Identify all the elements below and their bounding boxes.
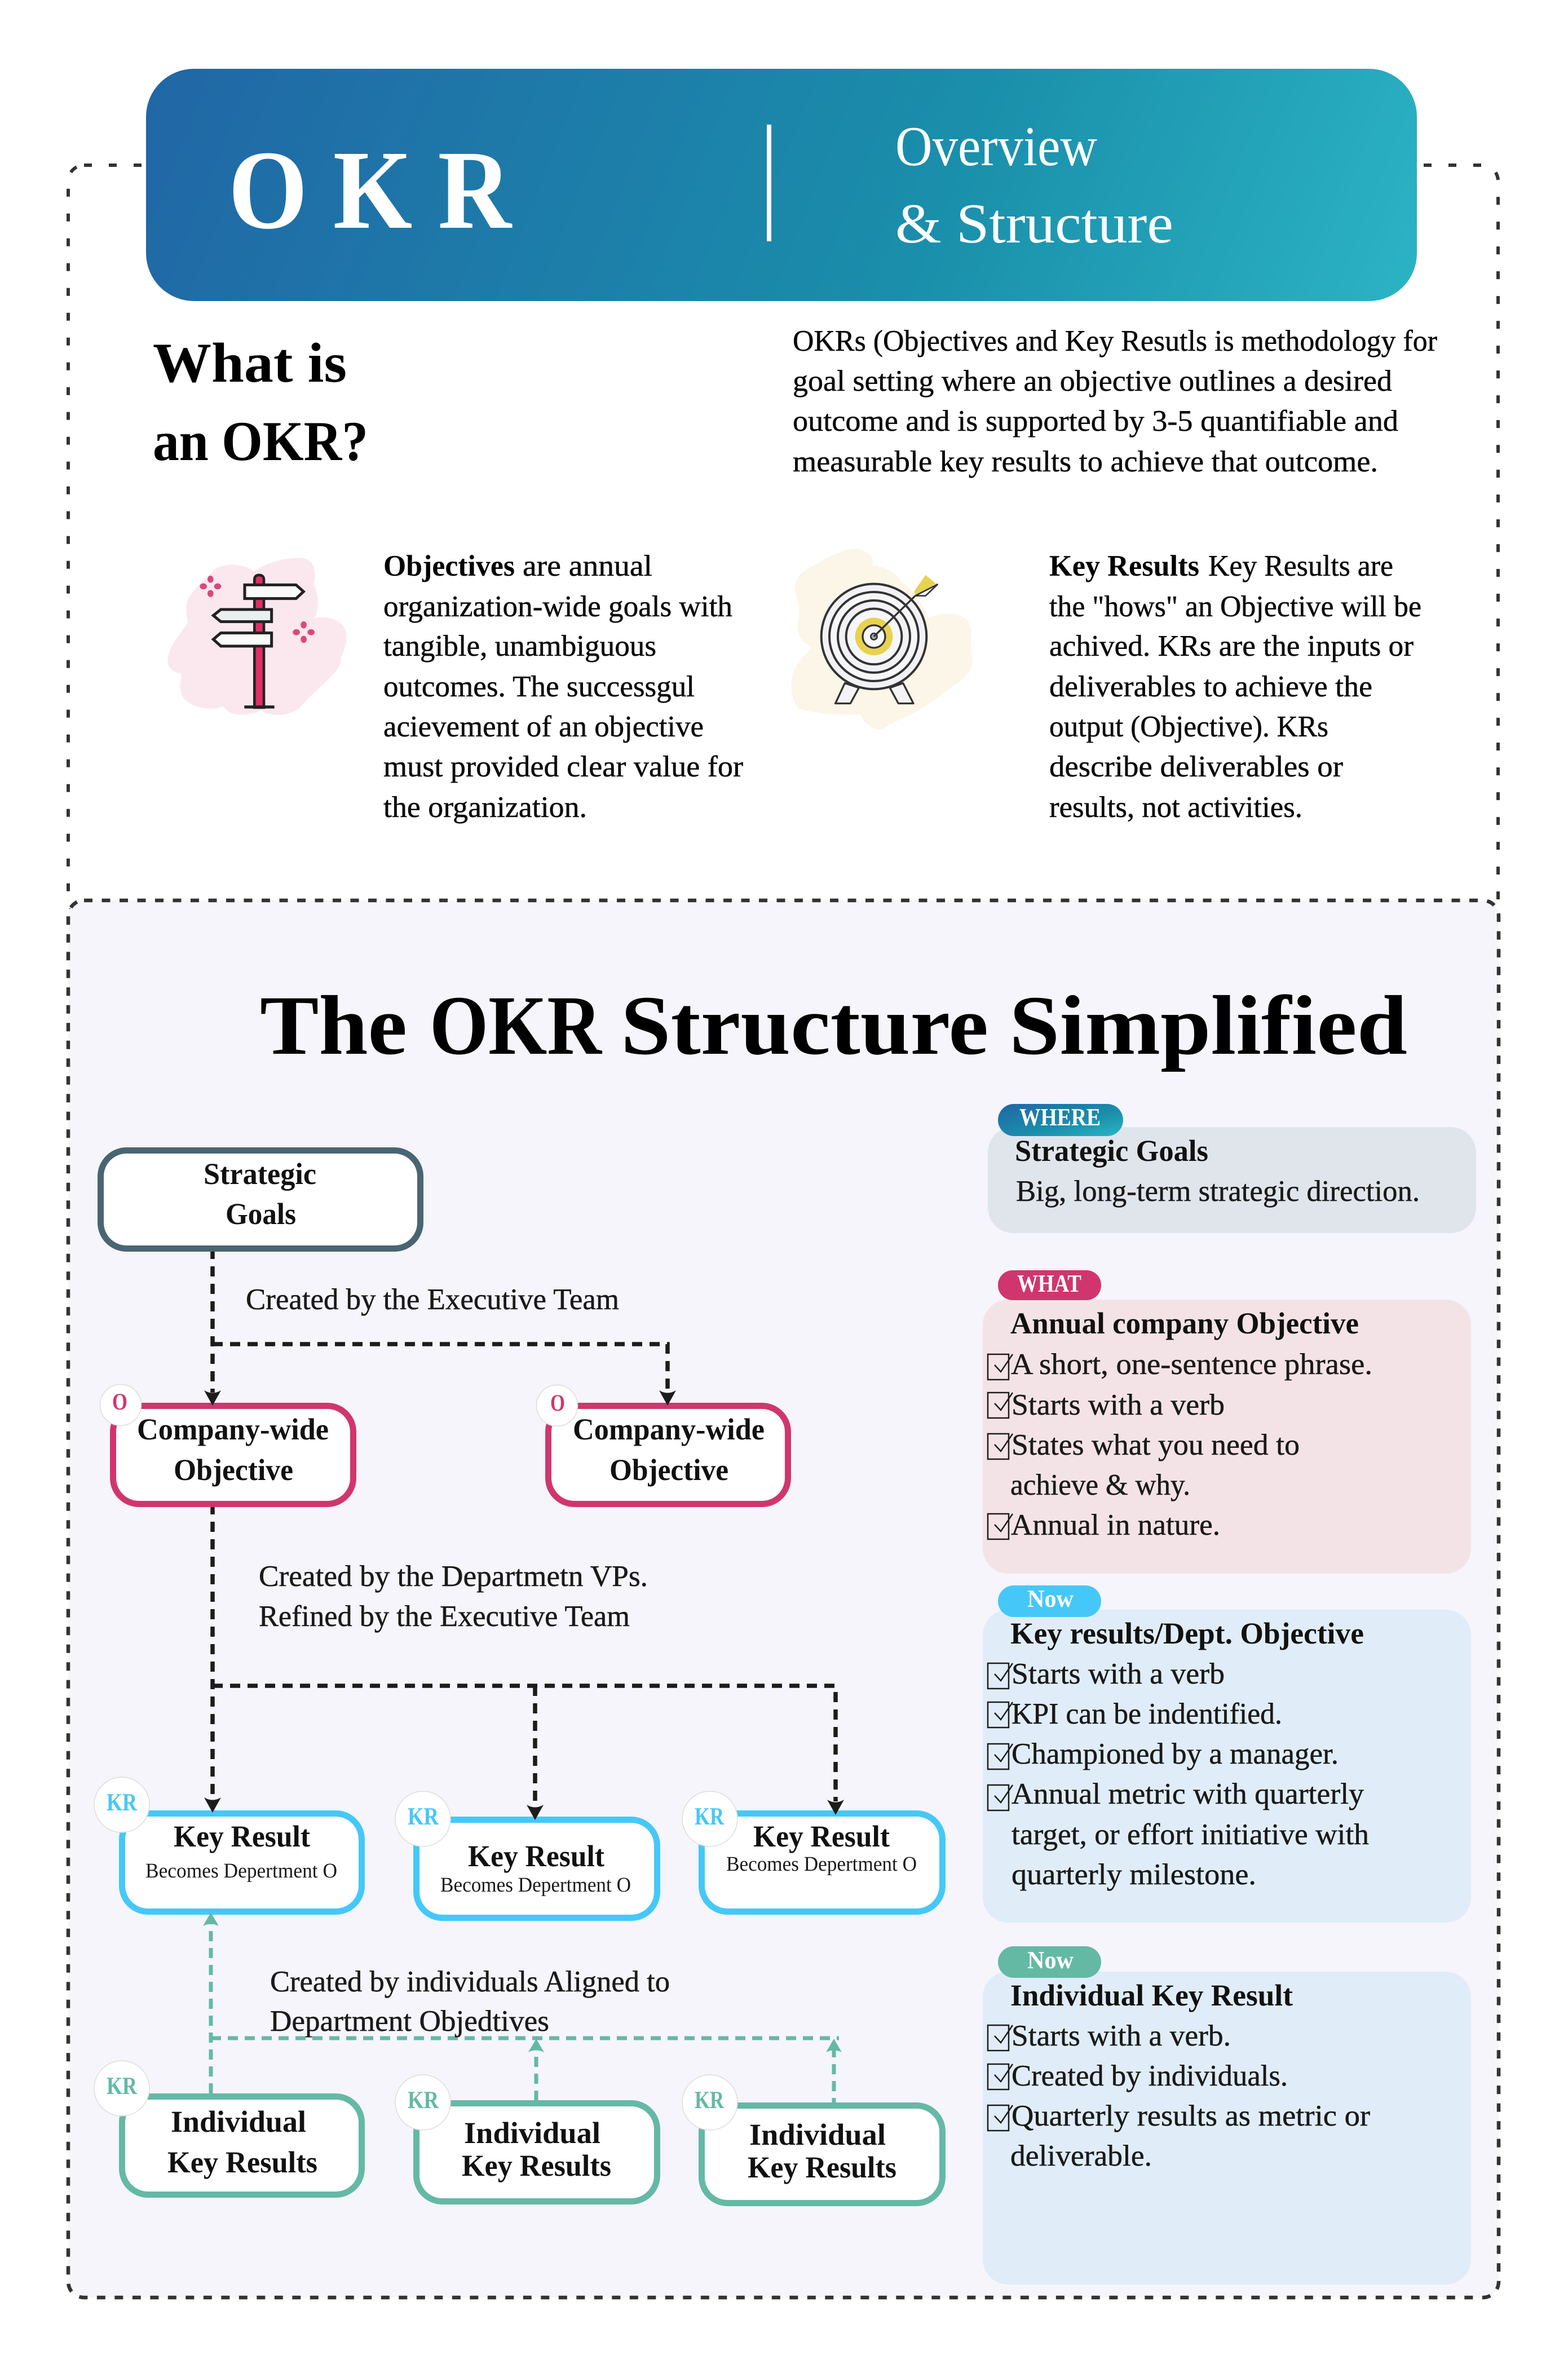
box: key result 2 [395, 1791, 657, 1918]
heading: What is an OKR?: What is [153, 332, 347, 394]
box: company objective left: Objective [174, 1453, 293, 1487]
checklist item: States what you need to [1012, 1429, 1300, 1461]
heading: What is an OKR? [153, 332, 368, 472]
subtitle [895, 115, 1173, 255]
box: Strategic Goals [100, 1150, 421, 1248]
checklist item: Annual in nature. [1011, 1509, 1220, 1541]
checklist item: Championed by a manager. [1012, 1738, 1339, 1770]
checklist item [988, 2100, 1370, 2172]
checklist item: target, or effort initiative with [1012, 1818, 1369, 1851]
arrowheads: black [204, 1390, 844, 1820]
box: individual key results 2: Individual [464, 2116, 600, 2150]
checklist item: Starts with a verb. [1012, 2020, 1231, 2052]
panel: Key results / Dept. Objective legend [983, 1585, 1471, 1923]
box: key result 3: Key Result [753, 1819, 890, 1853]
box: individual key results 3: Key Results [748, 2150, 896, 2184]
checklist item: deliverable. [1010, 2140, 1152, 2172]
panel: Key results / Dept. Objective legend: Key results/Dept. Objective [1010, 1616, 1364, 1650]
heading: The OKR Structure Simplified [260, 979, 1407, 1072]
box: company objective right [537, 1385, 788, 1504]
checklist item: Starts with a verb [1012, 1389, 1225, 1421]
checklist item [988, 1778, 1369, 1891]
checklist item: Annual metric with quarterly [1012, 1778, 1364, 1810]
icon: signpost [167, 558, 347, 715]
panel: structure dashed frame [68, 900, 1499, 2298]
connectors: individual level [211, 1923, 839, 2108]
checklist item: KPI can be indentified. [1012, 1698, 1282, 1730]
checklist item: A short, one-sentence phrase. [1011, 1348, 1372, 1381]
heading: What is an OKR?: an OKR? [153, 410, 368, 472]
label: department VPs: Refined by the Executive Team [259, 1600, 630, 1633]
text block: Key Results: the "hows" an Objective will be [1049, 590, 1421, 623]
heading: The OKR Structure Simplified: OKR [430, 979, 602, 1072]
box: individual key results 2: Key Results [462, 2149, 611, 2183]
subtitle: & Structure [895, 192, 1173, 255]
connectors: executive level [213, 1249, 668, 1393]
connectors: department level [213, 1504, 836, 1807]
box: company objective left: O [112, 1389, 127, 1415]
text block: Key Results: deliverables to achieve the [1049, 670, 1372, 703]
text block: Key Results: achived. KRs are the inputs or [1049, 630, 1414, 662]
text block: Objectives: the organization. [383, 791, 587, 824]
box: key result 1: KR [107, 1788, 138, 1816]
checklist item: quarterly milestone. [1012, 1858, 1256, 1891]
text block: OKR definition [793, 325, 1437, 478]
text block: OKR definition: outcome and is supported by 3-5 quantifiable and [793, 405, 1398, 438]
panel: Annual company Objective legend [983, 1270, 1471, 1574]
label: executive team: Created by the Executive Team [246, 1283, 619, 1316]
text block: Key Results: describe deliverables or [1049, 750, 1343, 783]
text block: Key Results: Key Results [1049, 550, 1199, 582]
box: individual key results 1 [94, 2061, 362, 2194]
text block: Objectives [383, 550, 743, 824]
pill: Now teal [998, 1946, 1101, 1978]
pill: WHERE: WHERE [1019, 1103, 1101, 1131]
text block: Objectives: must provided clear value for [383, 750, 743, 783]
box: company objective right: Company-wide [573, 1412, 765, 1446]
label: individuals [270, 1965, 670, 2038]
text block: Objectives: are annual [523, 550, 652, 582]
box: key result 3: KR [695, 1802, 725, 1830]
checklist item [988, 1429, 1300, 1501]
box: company objective left: Company-wide [137, 1412, 329, 1446]
label: individuals: Created by individuals Aligned to [270, 1965, 670, 1998]
pill: Now blue [998, 1585, 1101, 1617]
icon: target with arrow [791, 549, 973, 730]
arrowheads: teal [203, 1912, 842, 2052]
box: key result 3 [682, 1791, 943, 1911]
text block: Objectives: tangible, unambiguous [383, 630, 656, 662]
box: key result 2: Becomes Depertment O [440, 1874, 631, 1897]
box: Strategic Goals: Goals [226, 1197, 296, 1231]
panel: Individual Key Result legend [983, 1946, 1471, 2285]
checklist item: Starts with a verb [1012, 1658, 1225, 1690]
box: individual key results 1: Key Results [167, 2145, 317, 2179]
text block: OKR definition: goal setting where an objective outlines a desired [793, 365, 1392, 397]
box: key result 1: Becomes Depertment O [145, 1859, 337, 1883]
label: department VPs: Created by the Departmetn VPs. [259, 1560, 648, 1593]
box: individual key results 2: KR [408, 2086, 439, 2114]
panel: Strategic Goals legend: Strategic Goals [1015, 1134, 1208, 1168]
box: individual key results 3: Individual [749, 2118, 886, 2151]
subtitle: Overview [895, 115, 1097, 178]
text block: Objectives: Objectives [383, 550, 515, 582]
box: individual key results 3 [682, 2075, 943, 2203]
box: individual key results 1: Individual [171, 2105, 306, 2139]
box: Strategic Goals: Strategic [204, 1157, 316, 1191]
text block: Key Results: results, not activities. [1049, 791, 1302, 824]
box: key result 2: KR [408, 1802, 439, 1830]
text block: Objectives: organization-wide goals with [383, 590, 732, 623]
box: individual key results 1: KR [107, 2072, 138, 2100]
checklist item: Created by individuals. [1012, 2060, 1288, 2092]
box: individual key results 3: KR [695, 2086, 725, 2114]
box: key result 2: Key Result [468, 1839, 604, 1873]
panel: intro dashed frame [68, 165, 1498, 915]
panel: Strategic Goals legend [988, 1103, 1476, 1233]
box: key result 1 [94, 1777, 362, 1911]
label: individuals: Department Objedtives [270, 2005, 549, 2038]
box: company objective right: O [550, 1390, 565, 1416]
text block: Key Results: Key Results are [1208, 550, 1393, 582]
label: department VPs [259, 1560, 648, 1633]
checklist item: Quarterly results as metric or [1012, 2100, 1370, 2132]
pill: WHAT [998, 1270, 1101, 1300]
box: company objective left [100, 1385, 353, 1504]
text block: OKR definition: measurable key results to achieve that outcome. [793, 445, 1378, 478]
box: key result 3: Becomes Depertment O [726, 1853, 917, 1876]
checklist item: achieve & why. [1010, 1469, 1190, 1501]
text block: Key Results: output (Objective). KRs [1049, 710, 1328, 743]
box: company objective right: Objective [609, 1453, 728, 1487]
text block: Objectives: acievement of an objective [383, 710, 704, 743]
box: key result 1: Key Result [174, 1819, 310, 1853]
panel: Annual company Objective legend: Annual company Objective [1010, 1306, 1359, 1340]
pill: WHERE [998, 1103, 1123, 1136]
heading: The OKR Structure Simplified: Simplified [1009, 979, 1407, 1072]
title: OKR: O K R [228, 128, 513, 253]
heading: The OKR Structure Simplified: Structure [621, 979, 988, 1072]
pill: Now teal: Now [1027, 1946, 1074, 1974]
pill: Now blue: Now [1027, 1585, 1074, 1612]
text block: Key Results [1049, 550, 1421, 824]
heading: The OKR Structure Simplified: The [260, 979, 407, 1072]
text block: OKR definition: OKRs (Objectives and Key Resutls is methodology for [793, 325, 1437, 357]
box: individual key results 2 [395, 2075, 657, 2201]
panel: Individual Key Result legend: Individual Key Result [1010, 1978, 1293, 2012]
text block: Objectives: outcomes. The successgul [383, 670, 695, 703]
header banner [146, 69, 1417, 301]
panel: Strategic Goals legend: Big, long-term strategic direction. [1016, 1175, 1420, 1208]
pill: WHAT: WHAT [1017, 1270, 1081, 1297]
